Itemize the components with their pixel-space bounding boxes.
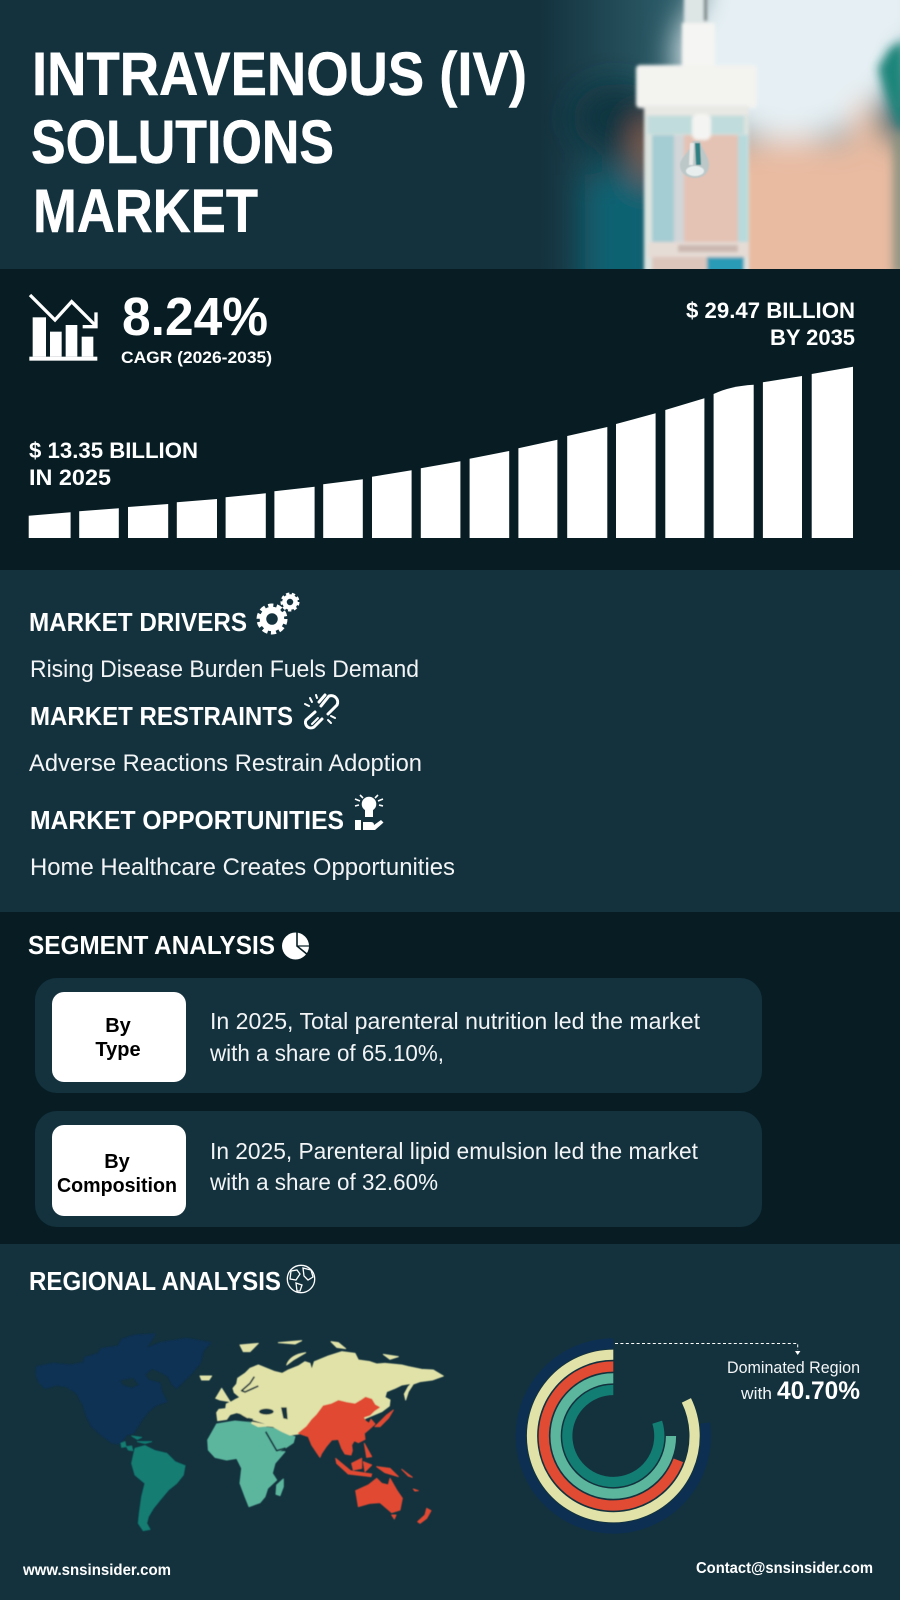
title: SOLUTIONS	[31, 108, 334, 176]
heading: regional analysis: REGIONAL ANALYSIS	[29, 1268, 281, 1296]
title: MARKET	[33, 177, 258, 245]
icon: gears	[259, 594, 298, 632]
2025 value: $ 13.35 BILLION	[29, 438, 198, 463]
map: north america and greenland	[36, 1334, 211, 1444]
photo: IV drip chamber	[560, 0, 900, 269]
CAGR value: 8.24%	[122, 287, 268, 347]
2025 value	[29, 438, 198, 490]
callout: dominated region: 40.70%	[777, 1377, 860, 1405]
icon: globe	[287, 1265, 315, 1293]
heading: market opportunities: MARKET OPPORTUNITIES	[30, 805, 344, 835]
panel: segment analysis	[0, 912, 900, 1244]
radial bar chart	[521, 1344, 706, 1528]
title	[31, 40, 527, 245]
callout arrow: dashed leader	[615, 1344, 800, 1355]
icon: chart with falling arrow	[29, 295, 97, 361]
card: by composition: By	[104, 1151, 131, 1173]
card: by composition: In 2025, Parenteral lipid emulsion led the market	[210, 1138, 699, 1164]
card: by type: with a share of 65.10%,	[209, 1040, 444, 1066]
2035 value: $ 29.47 BILLION	[686, 298, 855, 323]
footer: contact: Contact@snsinsider.com	[696, 1560, 873, 1577]
map: asia pacific	[298, 1397, 431, 1523]
callout: dominated region: Dominated Region	[727, 1358, 860, 1377]
card: by type	[35, 978, 762, 1093]
2035 value	[686, 298, 855, 350]
icon: broken chain	[305, 695, 338, 728]
map: europe and north asia	[200, 1341, 443, 1435]
card: by composition: with a share of 32.60%	[209, 1169, 438, 1195]
panel: market dynamics	[0, 570, 900, 912]
bar chart: market growth	[29, 367, 853, 538]
text: restraint: Adverse Reactions Restrain Adoption	[29, 750, 422, 777]
text: driver: Rising Disease Burden Fuels Demand	[30, 656, 419, 683]
CAGR label: CAGR (2026-2035)	[121, 348, 272, 367]
2025 value: IN 2025	[29, 465, 111, 490]
world map	[36, 1334, 443, 1531]
icon: bulb in hand	[355, 795, 384, 830]
heading: segment analysis: SEGMENT ANALYSIS	[28, 930, 275, 960]
panel: header	[32, 0, 900, 269]
card: by type: By	[105, 1015, 132, 1037]
title: INTRAVENOUS (IV)	[32, 40, 527, 108]
card: by type: Type	[95, 1039, 141, 1061]
card: by composition: Composition	[57, 1175, 177, 1197]
card: by type: In 2025, Total parenteral nutrition led the market	[210, 1008, 701, 1034]
panel: market size	[0, 269, 900, 570]
heading: market drivers: MARKET DRIVERS	[29, 607, 247, 637]
heading: market restraints: MARKET RESTRAINTS	[30, 701, 293, 731]
icon: pie chart	[282, 931, 310, 960]
panel: regional analysis	[0, 1244, 900, 1600]
footer: website: www.snsinsider.com	[22, 1562, 171, 1579]
2035 value: BY 2035	[770, 325, 855, 350]
map: africa and middle east	[208, 1421, 295, 1507]
callout: dominated region	[727, 1358, 860, 1405]
card: by composition	[35, 1111, 762, 1227]
map: south america	[121, 1436, 185, 1531]
text: opportunity: Home Healthcare Creates Opportunities	[30, 854, 455, 881]
callout: dominated region: with	[740, 1384, 772, 1403]
